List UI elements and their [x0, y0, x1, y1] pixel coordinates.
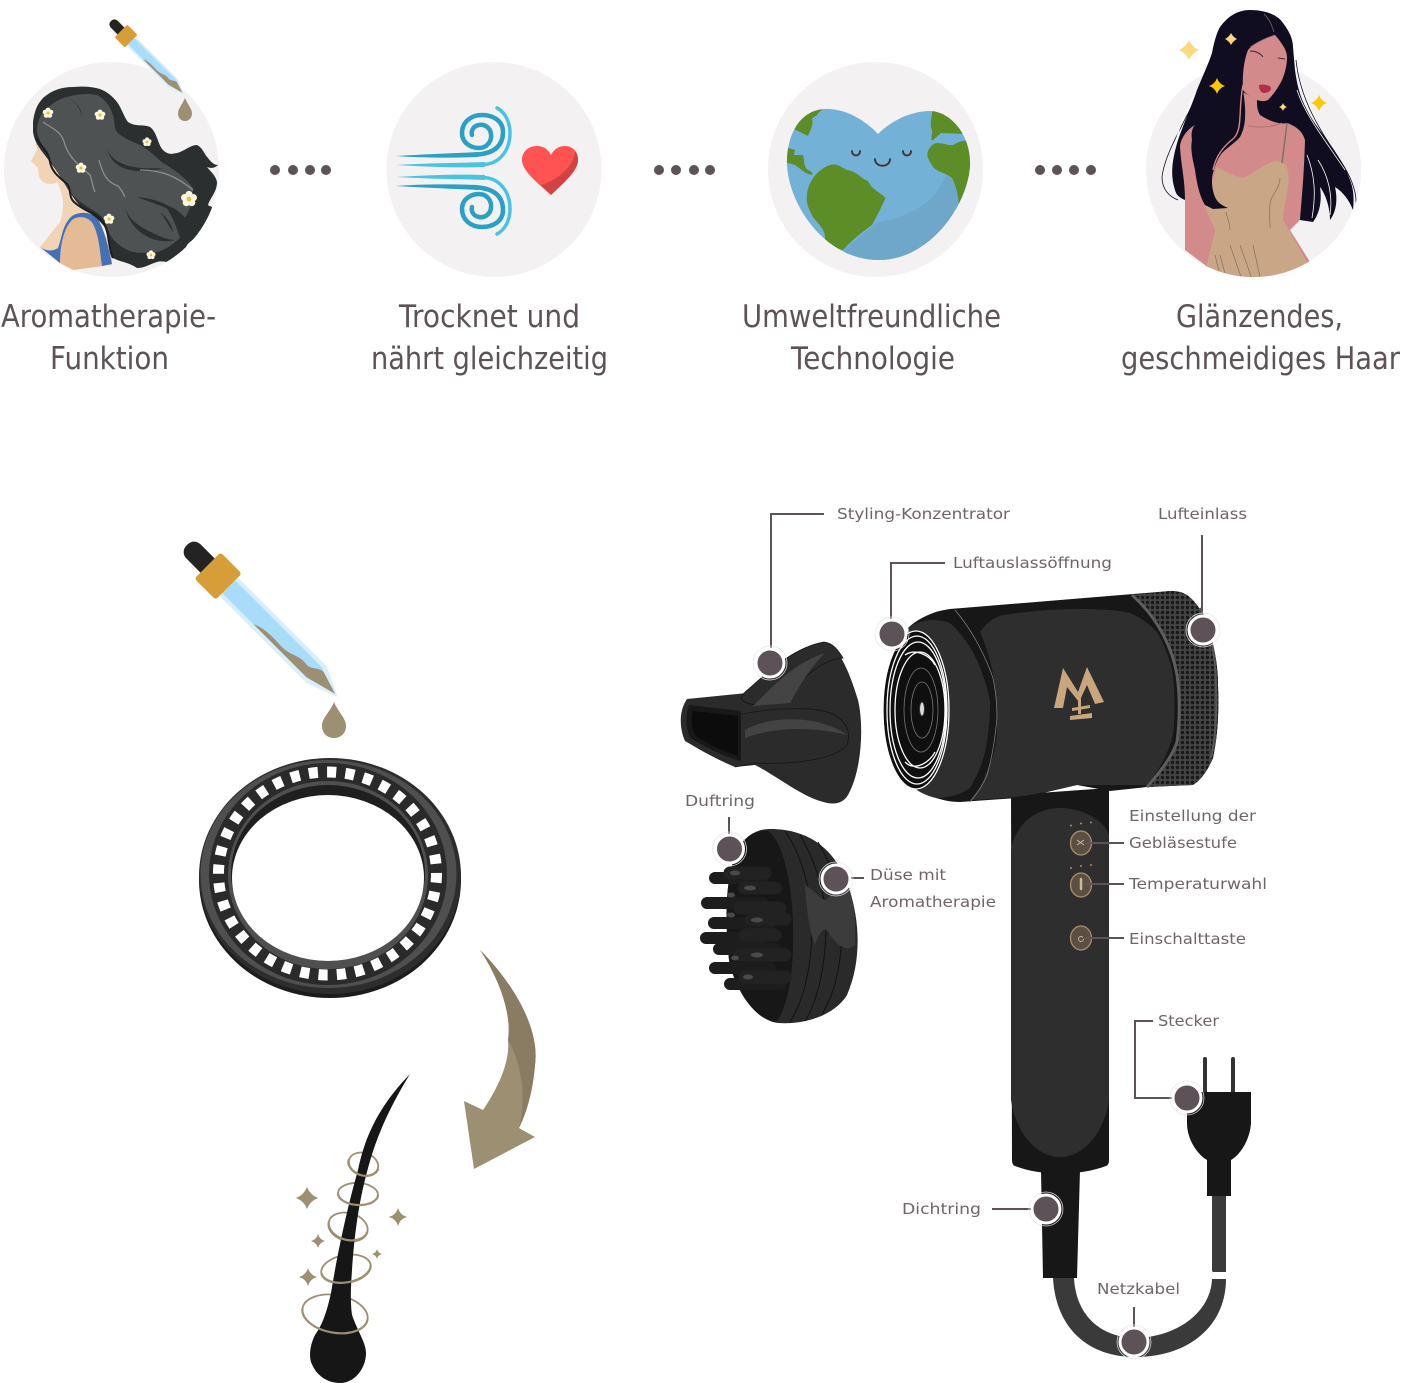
globe face [852, 151, 911, 166]
callout: Lufteinlass [1158, 505, 1247, 647]
panel: eco-friendly technology [742, 62, 1001, 377]
connector dots 2 [654, 165, 715, 175]
callout: Dichtring [902, 1192, 1063, 1226]
callout: Duftring [685, 792, 755, 866]
fan speed button [1070, 822, 1092, 855]
callout: Einstellung der Gebläsestufe: Einstellung der [1129, 807, 1257, 825]
panel: scent ring process [174, 532, 536, 1383]
icon: heart [522, 146, 578, 195]
cable break [1211, 1271, 1227, 1277]
power button [1070, 926, 1092, 950]
callout: Styling-Konzentrator: Styling-Konzentrator [837, 505, 1011, 523]
heart shade [541, 151, 578, 195]
sparkles [296, 1187, 407, 1286]
callout: Lufteinlass: Lufteinlass [1158, 505, 1247, 523]
temperature button [1070, 864, 1092, 897]
callout: Netzkabel: Netzkabel [1097, 1280, 1180, 1298]
nose highlight [955, 610, 997, 802]
callout: Düse mit Aromatherapie: Aromatherapie [870, 893, 996, 911]
sparkles [1179, 33, 1327, 111]
panel: dries and nourishes [371, 62, 608, 377]
callout: Stecker: Stecker [1158, 1012, 1220, 1030]
circle background [386, 62, 602, 277]
callout: Düse mit Aromatherapie [819, 862, 996, 911]
illustration: hair dryer [883, 591, 1251, 1357]
callout: Netzkabel [1097, 1280, 1180, 1359]
panel: aromatherapy feature [1, 15, 219, 377]
caption: Funktion [50, 341, 169, 377]
inlet rim [1200, 608, 1216, 758]
caption: Aromatherapie- [1, 299, 216, 335]
connector dots 3 [1035, 165, 1096, 175]
callout: Einschalttaste: Einschalttaste [1129, 930, 1246, 948]
plug [1187, 1057, 1251, 1196]
handle [1011, 788, 1109, 1174]
icon: heart-shaped globe [786, 109, 970, 260]
knurled air inlet [1132, 591, 1218, 787]
icon: large dropper [174, 532, 351, 709]
illustration: woman with long black hair [1162, 10, 1356, 285]
caption: Umweltfreundliche [742, 299, 1001, 335]
cable [1053, 1278, 1226, 1357]
icon: large oil drop [322, 702, 346, 738]
arrow [464, 950, 536, 1169]
callout: Stecker [1135, 1012, 1220, 1115]
caption: nährt gleichzeitig [371, 341, 608, 377]
panel: shiny silky hair [1121, 10, 1400, 377]
circle background [1146, 62, 1361, 277]
circle background [768, 62, 983, 277]
icon: wind [396, 108, 510, 234]
handle collar [1041, 1170, 1080, 1278]
callout: Styling-Konzentrator [753, 505, 1011, 680]
callout: Einstellung der Gebläsestufe: Gebläsestufe [1129, 834, 1237, 852]
icon: small dropper [105, 15, 190, 100]
logo [1054, 667, 1104, 720]
illustration: woman with flowing hair [31, 87, 218, 270]
caption: Trocknet und [398, 299, 580, 335]
caption: Glänzendes, [1176, 299, 1343, 335]
caption: Technologie [790, 341, 955, 377]
illustration: hair strand with rings [299, 1074, 410, 1383]
connector dots 1 [270, 165, 331, 175]
inlet band [1132, 595, 1179, 787]
callout: Duftring: Duftring [685, 792, 755, 810]
callout: Dichtring: Dichtring [902, 1200, 981, 1218]
callout: Luftauslassöffnung: Luftauslassöffnung [953, 554, 1112, 572]
icon: small oil drop [178, 98, 192, 121]
illustration: aroma ring [199, 758, 461, 998]
main panel [970, 609, 1174, 800]
callout: Einstellung der Gebläsestufe [1083, 807, 1257, 852]
callout: Luftauslassöffnung [875, 554, 1112, 651]
front nose [907, 620, 990, 798]
handle panel [1011, 808, 1109, 1157]
air outlet [883, 631, 949, 789]
circle background [4, 62, 219, 277]
illustration: styling concentrator [681, 642, 861, 803]
callout: Düse mit Aromatherapie: Düse mit [870, 866, 946, 884]
cable upper section [1212, 1195, 1226, 1272]
illustration: aromatherapy diffuser [706, 829, 858, 1023]
callout: Temperaturwahl: Temperaturwahl [1128, 875, 1267, 893]
body [907, 591, 1218, 802]
